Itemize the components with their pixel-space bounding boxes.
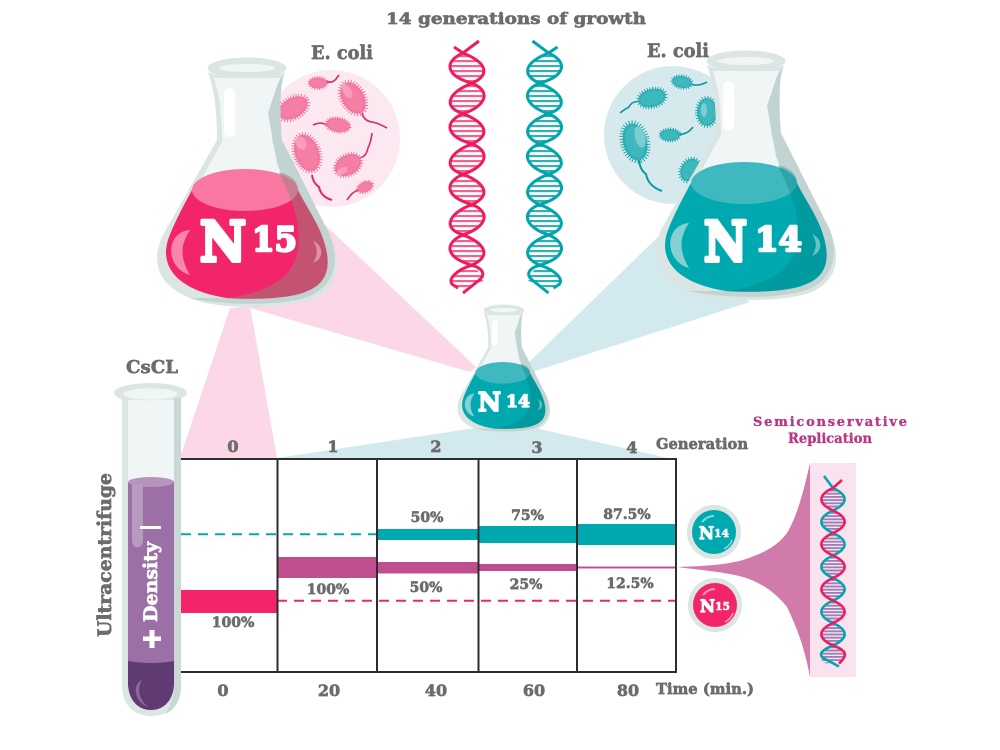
- percent labels: 25%: [510, 577, 542, 593]
- icon: N14 circle: [687, 505, 741, 559]
- N14 reference line: [181, 533, 378, 535]
- percent labels: 75%: [511, 508, 544, 524]
- panel: teal E. coli circle: [604, 66, 742, 204]
- icon: pink DNA helix: [450, 41, 484, 293]
- percent labels: 87.5%: [603, 507, 651, 523]
- percent labels: 12.5%: [606, 576, 654, 592]
- time axis labels: 40: [425, 681, 447, 700]
- label: Density: [140, 526, 162, 648]
- label: Semiconservative Replication: Semiconservative: [753, 415, 907, 430]
- label: Generation: Generation: [656, 435, 748, 453]
- band: generation 0: [181, 590, 277, 613]
- label: Semiconservative Replication: [753, 415, 907, 447]
- bands: generation 4: [578, 524, 676, 568]
- icon: N15 circle: N: [700, 597, 715, 617]
- label: N14 on small flask: N: [478, 388, 501, 418]
- icon: teal DNA helix: [527, 41, 562, 293]
- beam: N15 flask to small flask: [250, 223, 476, 372]
- chart grid: [181, 459, 676, 672]
- percent labels: 100%: [212, 615, 254, 631]
- generation axis labels: 2: [430, 437, 442, 456]
- time axis labels: 80: [617, 681, 639, 700]
- label: N14 on big flask: [704, 209, 802, 274]
- panel: pink E. coli circle: [263, 70, 400, 207]
- icon: N15 circle: [688, 578, 742, 632]
- label: N15 on big flask: 15: [252, 220, 297, 260]
- percent labels: 100%: [307, 582, 349, 598]
- percent labels: 50%: [411, 510, 443, 526]
- label: N15 on big flask: N: [200, 209, 246, 274]
- label: N14 on big flask: N: [704, 209, 747, 274]
- beam: N14 flask to small flask: [525, 235, 750, 372]
- label: N14 on small flask: 14: [506, 392, 530, 412]
- percent labels: [212, 507, 654, 631]
- label: Time: Time (min.): [656, 680, 754, 698]
- label: CsCL: CsCL: [126, 357, 178, 378]
- centrifuge tube: [114, 383, 187, 716]
- icon: N14 circle: 14: [714, 527, 729, 540]
- beam: small flask to chart: [277, 428, 668, 458]
- flask: N15: [157, 58, 337, 307]
- panel: semiconservative DNA: [810, 463, 856, 677]
- generation axis labels: 0: [227, 437, 239, 456]
- title: 14 generations of growth: [386, 9, 646, 28]
- generation axis labels: [227, 437, 638, 457]
- flask: N14 large: [656, 50, 836, 300]
- funnel: band to DNA panel: [677, 463, 810, 677]
- generation axis labels: 4: [626, 438, 638, 457]
- label: N14 on small flask: [478, 388, 530, 418]
- time axis labels: 0: [217, 681, 229, 700]
- label: Density: Density: [140, 541, 162, 622]
- time axis labels: 20: [318, 681, 340, 700]
- label: Ultracentrifuge: Ultracentrifuge: [94, 473, 116, 637]
- label: Semiconservative Replication: Replication: [788, 431, 872, 447]
- N15 reference line: [277, 600, 676, 602]
- beam: N15 flask to centrifuge tube: [180, 306, 277, 458]
- icon: N15 circle: 15: [715, 600, 730, 613]
- label: E. coli right: E. coli: [647, 40, 709, 62]
- icon: N14 circle: N: [699, 524, 714, 544]
- flask: N14 small: [457, 305, 550, 433]
- percent labels: 50%: [410, 580, 442, 596]
- bands: generation 2: [378, 529, 478, 574]
- time axis labels: [217, 681, 639, 700]
- generation axis labels: 3: [531, 438, 543, 457]
- chart: density bands: [181, 459, 677, 672]
- bands: generation 3: [479, 526, 577, 571]
- band: generation 1: [278, 557, 376, 578]
- label: N15 on big flask: [200, 209, 297, 274]
- label: N14 on big flask: 14: [755, 220, 802, 260]
- generation axis labels: 1: [327, 437, 339, 456]
- label: E. coli left: E. coli: [311, 42, 373, 64]
- time axis labels: 60: [523, 681, 545, 700]
